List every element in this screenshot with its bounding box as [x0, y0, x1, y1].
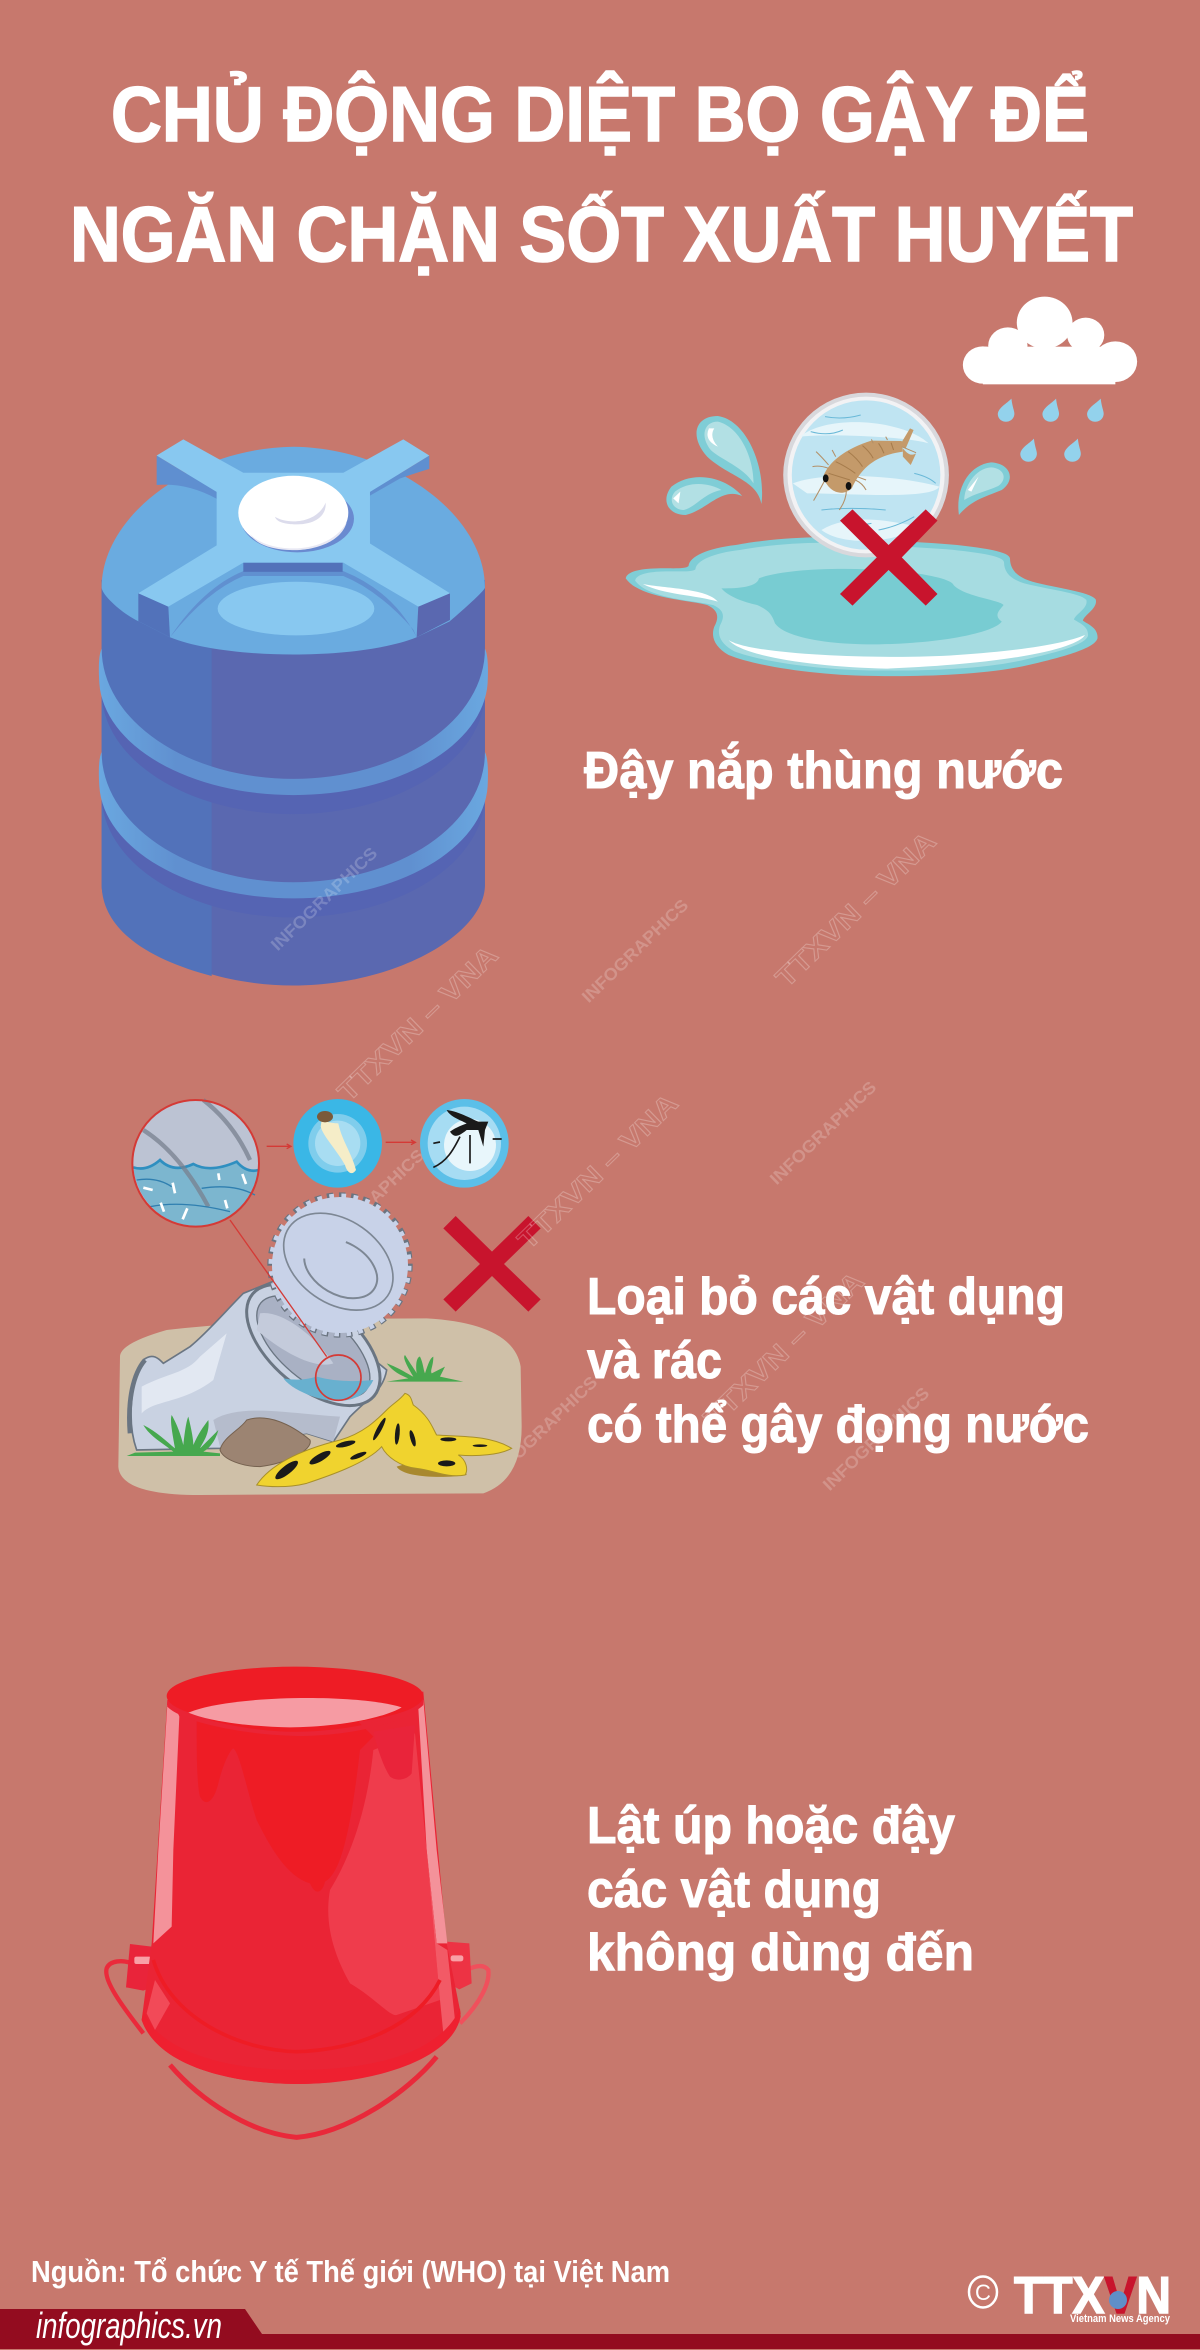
arrow 2: [386, 1140, 415, 1145]
watermarks: TTXVN – VNA: [332, 940, 504, 1107]
watermarks: INFOGRAPHICS: [819, 1384, 933, 1495]
larva magnifier: [783, 393, 949, 557]
title: CHỦ ĐỘNG DIỆT BỌ GẬY ĐỂ: [111, 70, 1089, 158]
icon: red cross: [443, 1216, 541, 1312]
watermarks: [267, 826, 942, 1495]
watermarks behind trash: INFOGRAPHICS: [314, 1146, 428, 1257]
splash drops: [666, 416, 1010, 515]
caption: remove trash: Loại bỏ các vật dụng: [587, 1268, 1065, 1326]
tank cross ribs: [138, 439, 450, 607]
watermarks: TTXVN – VNA: [512, 1088, 684, 1255]
cup: [129, 1261, 402, 1450]
caption: turn over containers: không dùng đến: [587, 1924, 974, 1982]
watermarks: TTXVN – VNA: [770, 826, 942, 993]
bucket body: [142, 1692, 461, 2084]
caption: turn over containers: các vật dụng: [587, 1861, 881, 1919]
caption: turn over containers: Lật úp hoặc đậy: [587, 1797, 955, 1855]
caption: remove trash: [587, 1268, 1089, 1454]
logo: TTXVN: TTXVN: [1014, 2267, 1171, 2325]
icon: rain cloud: [963, 297, 1137, 462]
footer band: infographics.vn: [36, 2305, 222, 2346]
caption: remove trash: có thể gây đọng nước: [587, 1396, 1089, 1454]
puddle: [626, 537, 1098, 676]
water larvae magnifier: [132, 1100, 259, 1227]
source note: Nguồn: Tổ chức Y tế Thế giới (WHO) tại Việt Nam: [31, 2254, 670, 2289]
grass right: [387, 1355, 463, 1382]
watermarks behind trash: INFOGRAPHICS: [487, 1373, 601, 1484]
can lid: [265, 1193, 411, 1334]
grass left: [127, 1415, 220, 1456]
magnifier line: [230, 1220, 327, 1357]
logo: TTXVN: Vietnam News Agency: [1070, 2313, 1171, 2325]
rock: [220, 1418, 310, 1467]
icon: red bucket: [106, 1667, 489, 2137]
watermarks: TTXVN – VNA: [698, 1266, 870, 1433]
tank ring lower: [99, 752, 488, 898]
watermarks: INFOGRAPHICS: [766, 1078, 880, 1189]
caption: remove trash: và rác: [587, 1332, 722, 1390]
bucket handle: [106, 1961, 489, 2137]
illustration: puddle with larva: [626, 297, 1137, 676]
watermarks behind trash: [314, 1146, 601, 1484]
mosquito circle: [420, 1099, 509, 1188]
watermarks: INFOGRAPHICS: [267, 844, 381, 955]
tank dome: [102, 447, 485, 654]
ground: [118, 1318, 522, 1495]
icon: water tank: [99, 439, 488, 986]
title: [70, 70, 1133, 278]
watermarks: INFOGRAPHICS: [578, 896, 692, 1007]
arrow 1: [267, 1144, 291, 1149]
larva circle: [293, 1099, 382, 1188]
tank cap: [238, 476, 348, 550]
footer band: [0, 2305, 1200, 2349]
bucket ears: [126, 1944, 153, 1991]
illustration: discarded trash: [118, 1099, 541, 1495]
icon: red cross: [840, 509, 937, 606]
tank ring upper: [99, 649, 488, 795]
water in cup: [283, 1377, 373, 1401]
caption: turn over containers: [587, 1797, 974, 1982]
logo: TTXVN: C: [975, 2280, 991, 2305]
banana peel: [257, 1393, 512, 1487]
caption: cover water tank: Đậy nắp thùng nước: [584, 741, 1063, 800]
bucket rim: [167, 1667, 423, 1725]
larva: [812, 428, 916, 510]
